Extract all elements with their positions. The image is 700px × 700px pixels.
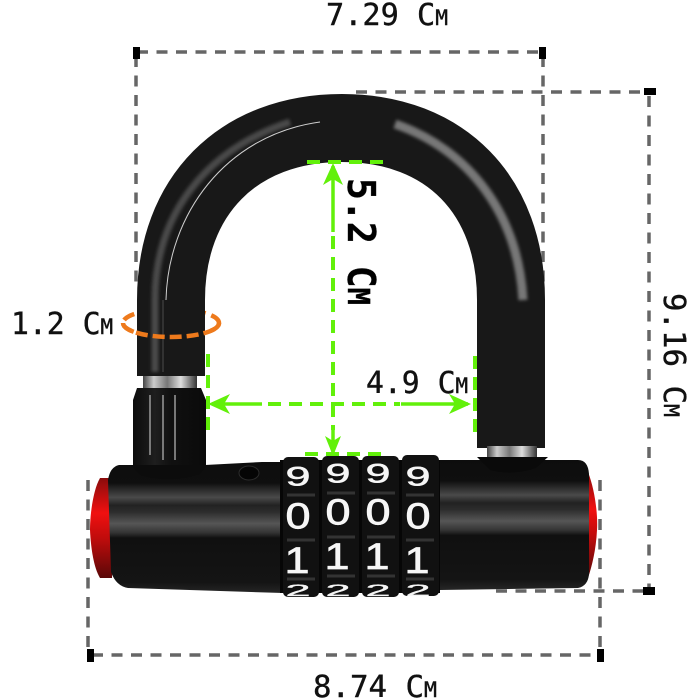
lock body left xyxy=(108,462,283,593)
padlock xyxy=(90,122,597,600)
keyhole xyxy=(239,466,259,480)
dimension line: 8.74 cm width xyxy=(87,480,604,662)
combination dials xyxy=(280,455,440,600)
left post base xyxy=(131,465,207,479)
green arrow: 4.9 cm inner width xyxy=(208,354,475,434)
dial digits: 0 xyxy=(365,492,391,533)
right flange xyxy=(477,457,548,473)
green arrow: 5.2 cm inner height xyxy=(305,162,383,456)
shackle xyxy=(155,122,525,448)
dial digits: 9 xyxy=(405,461,431,491)
dial digits: 9 xyxy=(285,461,311,491)
left red end cap xyxy=(90,478,112,578)
dial digits: 0 xyxy=(405,496,431,537)
orange ring: front half xyxy=(123,323,219,337)
label: 9.16 cm: 9.16 C M xyxy=(656,293,691,417)
dial digits: 1 xyxy=(324,536,350,577)
dial digits: 2 xyxy=(285,581,311,600)
dial digits: 0 xyxy=(325,492,351,533)
left post xyxy=(133,388,206,470)
dial digits: 1 xyxy=(404,540,430,581)
dial digits: 1 xyxy=(284,540,310,581)
label: 4.9 cm: 4.9 CM xyxy=(366,366,468,401)
right collar xyxy=(487,446,537,457)
label: 1.2 cm: 1.2 CM xyxy=(11,307,113,342)
dial digits: 1 xyxy=(364,536,390,577)
dial digits: 9 xyxy=(365,458,391,488)
lock body right xyxy=(440,460,589,590)
dial ridges xyxy=(287,493,434,579)
dimension line: 9.16 cm height xyxy=(356,88,656,595)
dial digits: 2 xyxy=(405,581,431,600)
label: 5.2 cm: 5.2 CM xyxy=(339,178,383,305)
dial digits: 2 xyxy=(365,581,391,600)
right red end cap xyxy=(584,472,597,578)
dimension line: 7.29 cm width xyxy=(133,47,546,290)
orange ring: back half xyxy=(123,309,219,337)
left collar xyxy=(143,376,197,388)
dial digits: 9 xyxy=(325,458,351,488)
post highlights xyxy=(150,395,175,460)
dial digits: 2 xyxy=(325,581,351,600)
dial digits: 0 xyxy=(285,496,311,537)
dial digits xyxy=(284,458,431,600)
